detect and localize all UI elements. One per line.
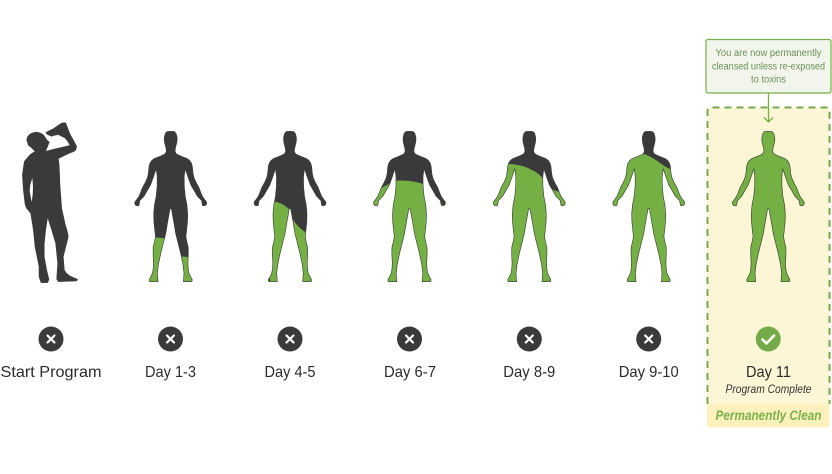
label: day 4-5: Day 4-5 — [264, 364, 316, 381]
figure: day 6-7 body — [373, 131, 446, 282]
column: day 11 — [716, 131, 822, 423]
column: day 9-10 — [609, 131, 689, 381]
figure: day 9-10 body — [612, 131, 685, 282]
callout: permanently cleansed — [706, 40, 831, 93]
figure: day 4-5 body — [254, 131, 330, 287]
column: start program — [0, 123, 102, 381]
icon: status cross — [278, 326, 302, 352]
figure: day 1-3 body — [134, 131, 207, 282]
column: day 1-3 — [131, 131, 211, 381]
column: day 8-9 — [489, 131, 569, 381]
figure: day 8-9 body — [493, 131, 566, 282]
icon: status cross — [397, 326, 422, 352]
figure: man drinking from bottle — [22, 123, 78, 283]
icon: status cross — [636, 326, 661, 352]
column: day 6-7 — [370, 131, 450, 381]
icon: status check — [756, 326, 781, 352]
label: start program: Start Program — [0, 364, 102, 381]
label: day 6-7: Day 6-7 — [384, 364, 436, 381]
figure: day 11 body — [732, 131, 804, 282]
label: day 1-3: Day 1-3 — [145, 364, 196, 381]
label: day 11: Day 11 — [746, 364, 791, 381]
callout: permanently cleansed: You are now permanently — [716, 48, 822, 59]
label: day 8-9: Day 8-9 — [503, 364, 555, 381]
callout: permanently cleansed: to toxins — [751, 74, 786, 86]
icon: status cross — [517, 326, 542, 352]
arrow: callout to final figure — [764, 93, 773, 122]
icon: status cross — [158, 326, 183, 352]
column: day 4-5 — [254, 131, 330, 381]
label: program complete: Program Complete — [726, 382, 812, 396]
label: day 9-10: Day 9-10 — [619, 364, 679, 381]
icon: status cross — [38, 326, 64, 352]
panel: permanently clean highlight — [707, 108, 830, 428]
